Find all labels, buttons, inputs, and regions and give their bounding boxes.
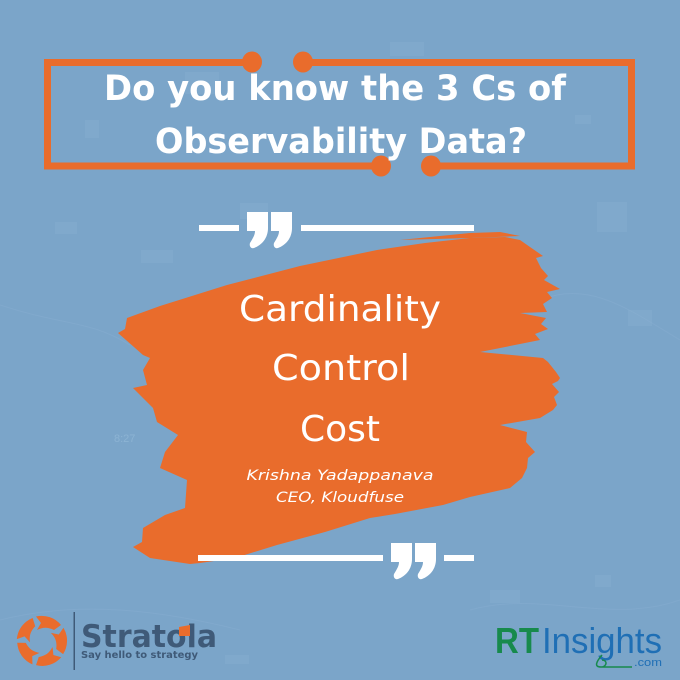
icon: pie accent	[179, 625, 190, 636]
attribution	[246, 468, 434, 506]
logo: Stratola	[12, 612, 217, 673]
title: Do you know the 3 Cs of	[104, 69, 567, 109]
logo: RTInsights: RT	[495, 620, 539, 661]
title	[104, 69, 567, 162]
attribution: CEO, Kloudfuse	[276, 490, 404, 506]
title frame	[48, 52, 632, 176]
title: Observability Data?	[155, 122, 527, 162]
wordmark: Stratola	[81, 619, 217, 655]
icon: swirl emblem	[12, 615, 72, 673]
word: cardinality: Cardinality	[239, 289, 441, 330]
divider rule	[74, 612, 75, 670]
logo: RTInsights: Insights	[542, 620, 662, 661]
attribution: Krishna Yadappanava	[246, 468, 434, 484]
text: 8:27	[114, 433, 135, 445]
word: cost: Cost	[300, 409, 380, 450]
main words	[239, 289, 441, 450]
word: control: Control	[272, 348, 410, 389]
logo: RTInsights: .com	[634, 657, 662, 669]
paint brush stroke	[118, 232, 560, 564]
opening quote mark with rules	[199, 212, 474, 248]
logo: RTInsights	[495, 620, 662, 669]
tagline: Say hello to strategy	[81, 650, 198, 661]
closing quote mark with rules	[198, 543, 474, 579]
